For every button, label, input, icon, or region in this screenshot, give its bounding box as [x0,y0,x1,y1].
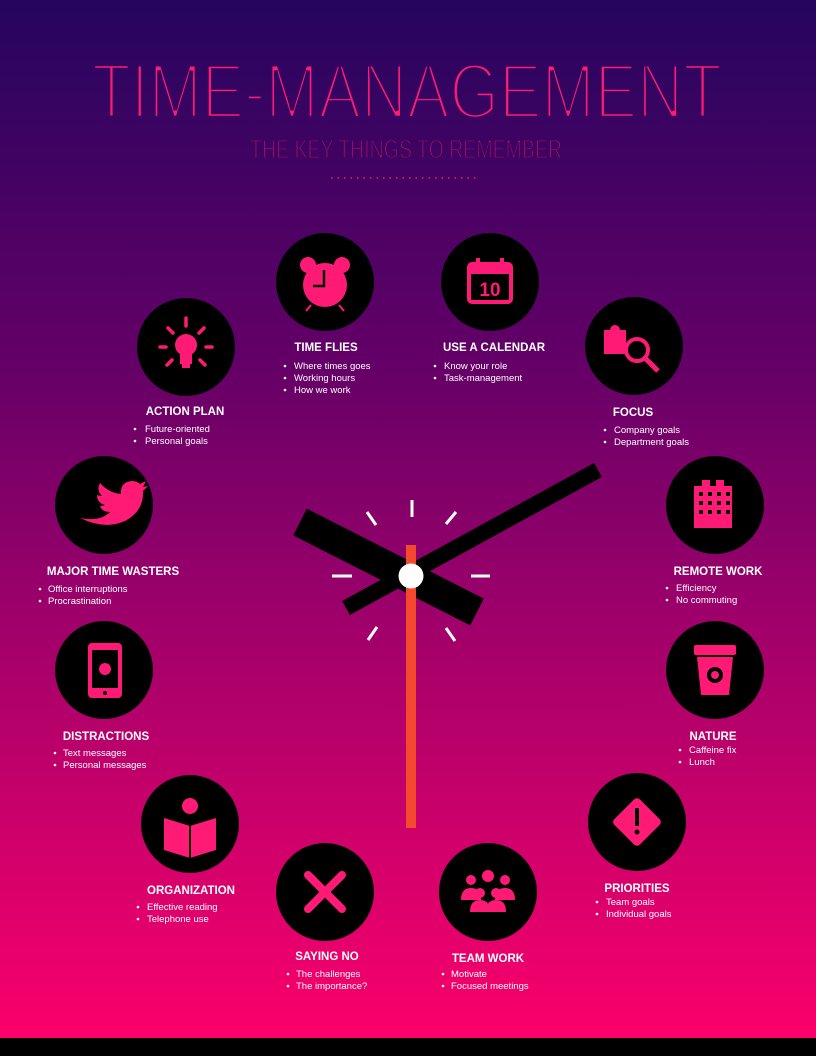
panel: priorities: PRIORITIES [604,883,670,895]
icon: phone [88,643,122,698]
panel: team work [439,843,537,992]
panel: remote work [666,456,764,606]
icon: calendar [469,258,511,302]
subtitle: THE KEY THINGS TO REMEMBER [250,134,562,164]
panel: distractions: DISTRACTIONS [63,731,149,743]
panel: distractions [54,621,153,771]
icon: cross [308,875,342,909]
panel: organization: Telephone use [147,914,209,925]
panel: priorities [588,773,686,920]
panel: action plan: Future-oriented [145,424,210,435]
panel: time flies: How we work [294,385,351,396]
panel: organization: Effective reading [147,902,218,913]
panel: time flies: TIME FLIES [294,342,358,354]
panel: focus: Company goals [614,425,680,436]
panel: major time wasters [39,456,179,607]
panel: major time wasters: Procrastination [48,596,111,607]
icon: coffee cup [694,645,736,695]
icon: calendar: 10 [479,280,501,301]
panel: use a calendar: USE A CALENDAR [443,342,546,354]
panel: nature [666,621,764,768]
panel: team work: TEAM WORK [452,953,525,965]
icon: building [694,480,732,528]
panel: nature: Caffeine fix [689,745,737,756]
panel: team work: Motivate [451,969,487,980]
panel: time flies: Where times goes [294,361,371,372]
icon: puzzle and magnifier [604,325,658,371]
panel: saying no [276,843,374,992]
panel: focus [585,297,689,448]
icon: warning diamond [612,797,662,847]
panel: priorities: Individual goals [606,909,672,920]
panel: nature: NATURE [689,731,737,743]
panel: organization: ORGANIZATION [147,885,235,897]
icon: team [461,870,515,912]
panel: distractions: Text messages [63,748,127,759]
icon: light bulb [160,318,212,368]
panel: focus: Department goals [614,437,689,448]
panel: priorities: Team goals [606,897,655,908]
panel: use a calendar [434,233,546,384]
panel: use a calendar: Task-management [444,373,523,384]
panel: distractions: Personal messages [63,760,147,771]
icon: twitter bird [80,481,148,525]
panel: action plan: ACTION PLAN [146,406,224,418]
panel: time flies: Working hours [294,373,355,384]
panel: remote work: Efficiency [676,583,717,594]
icon: alarm clock [300,257,350,311]
panel: major time wasters: MAJOR TIME WASTERS [47,566,179,578]
panel: time flies [276,233,374,396]
panel: remote work: No commuting [676,595,737,606]
panel: saying no: The importance? [296,981,367,992]
panel: use a calendar: Know your role [444,361,507,372]
panel: saying no: SAYING NO [295,951,359,963]
panel: team work: Focused meetings [451,981,529,992]
icon: reading person [164,798,216,858]
panel: saying no: The challenges [296,969,361,980]
panel: focus: FOCUS [613,407,653,419]
panel: remote work: REMOTE WORK [674,566,763,578]
panel: action plan: Personal goals [145,436,208,447]
clock [300,470,598,828]
panel: organization [137,775,239,925]
panel: major time wasters: Office interruptions [48,584,128,595]
panel: action plan [134,298,235,447]
panel: nature: Lunch [689,757,715,768]
